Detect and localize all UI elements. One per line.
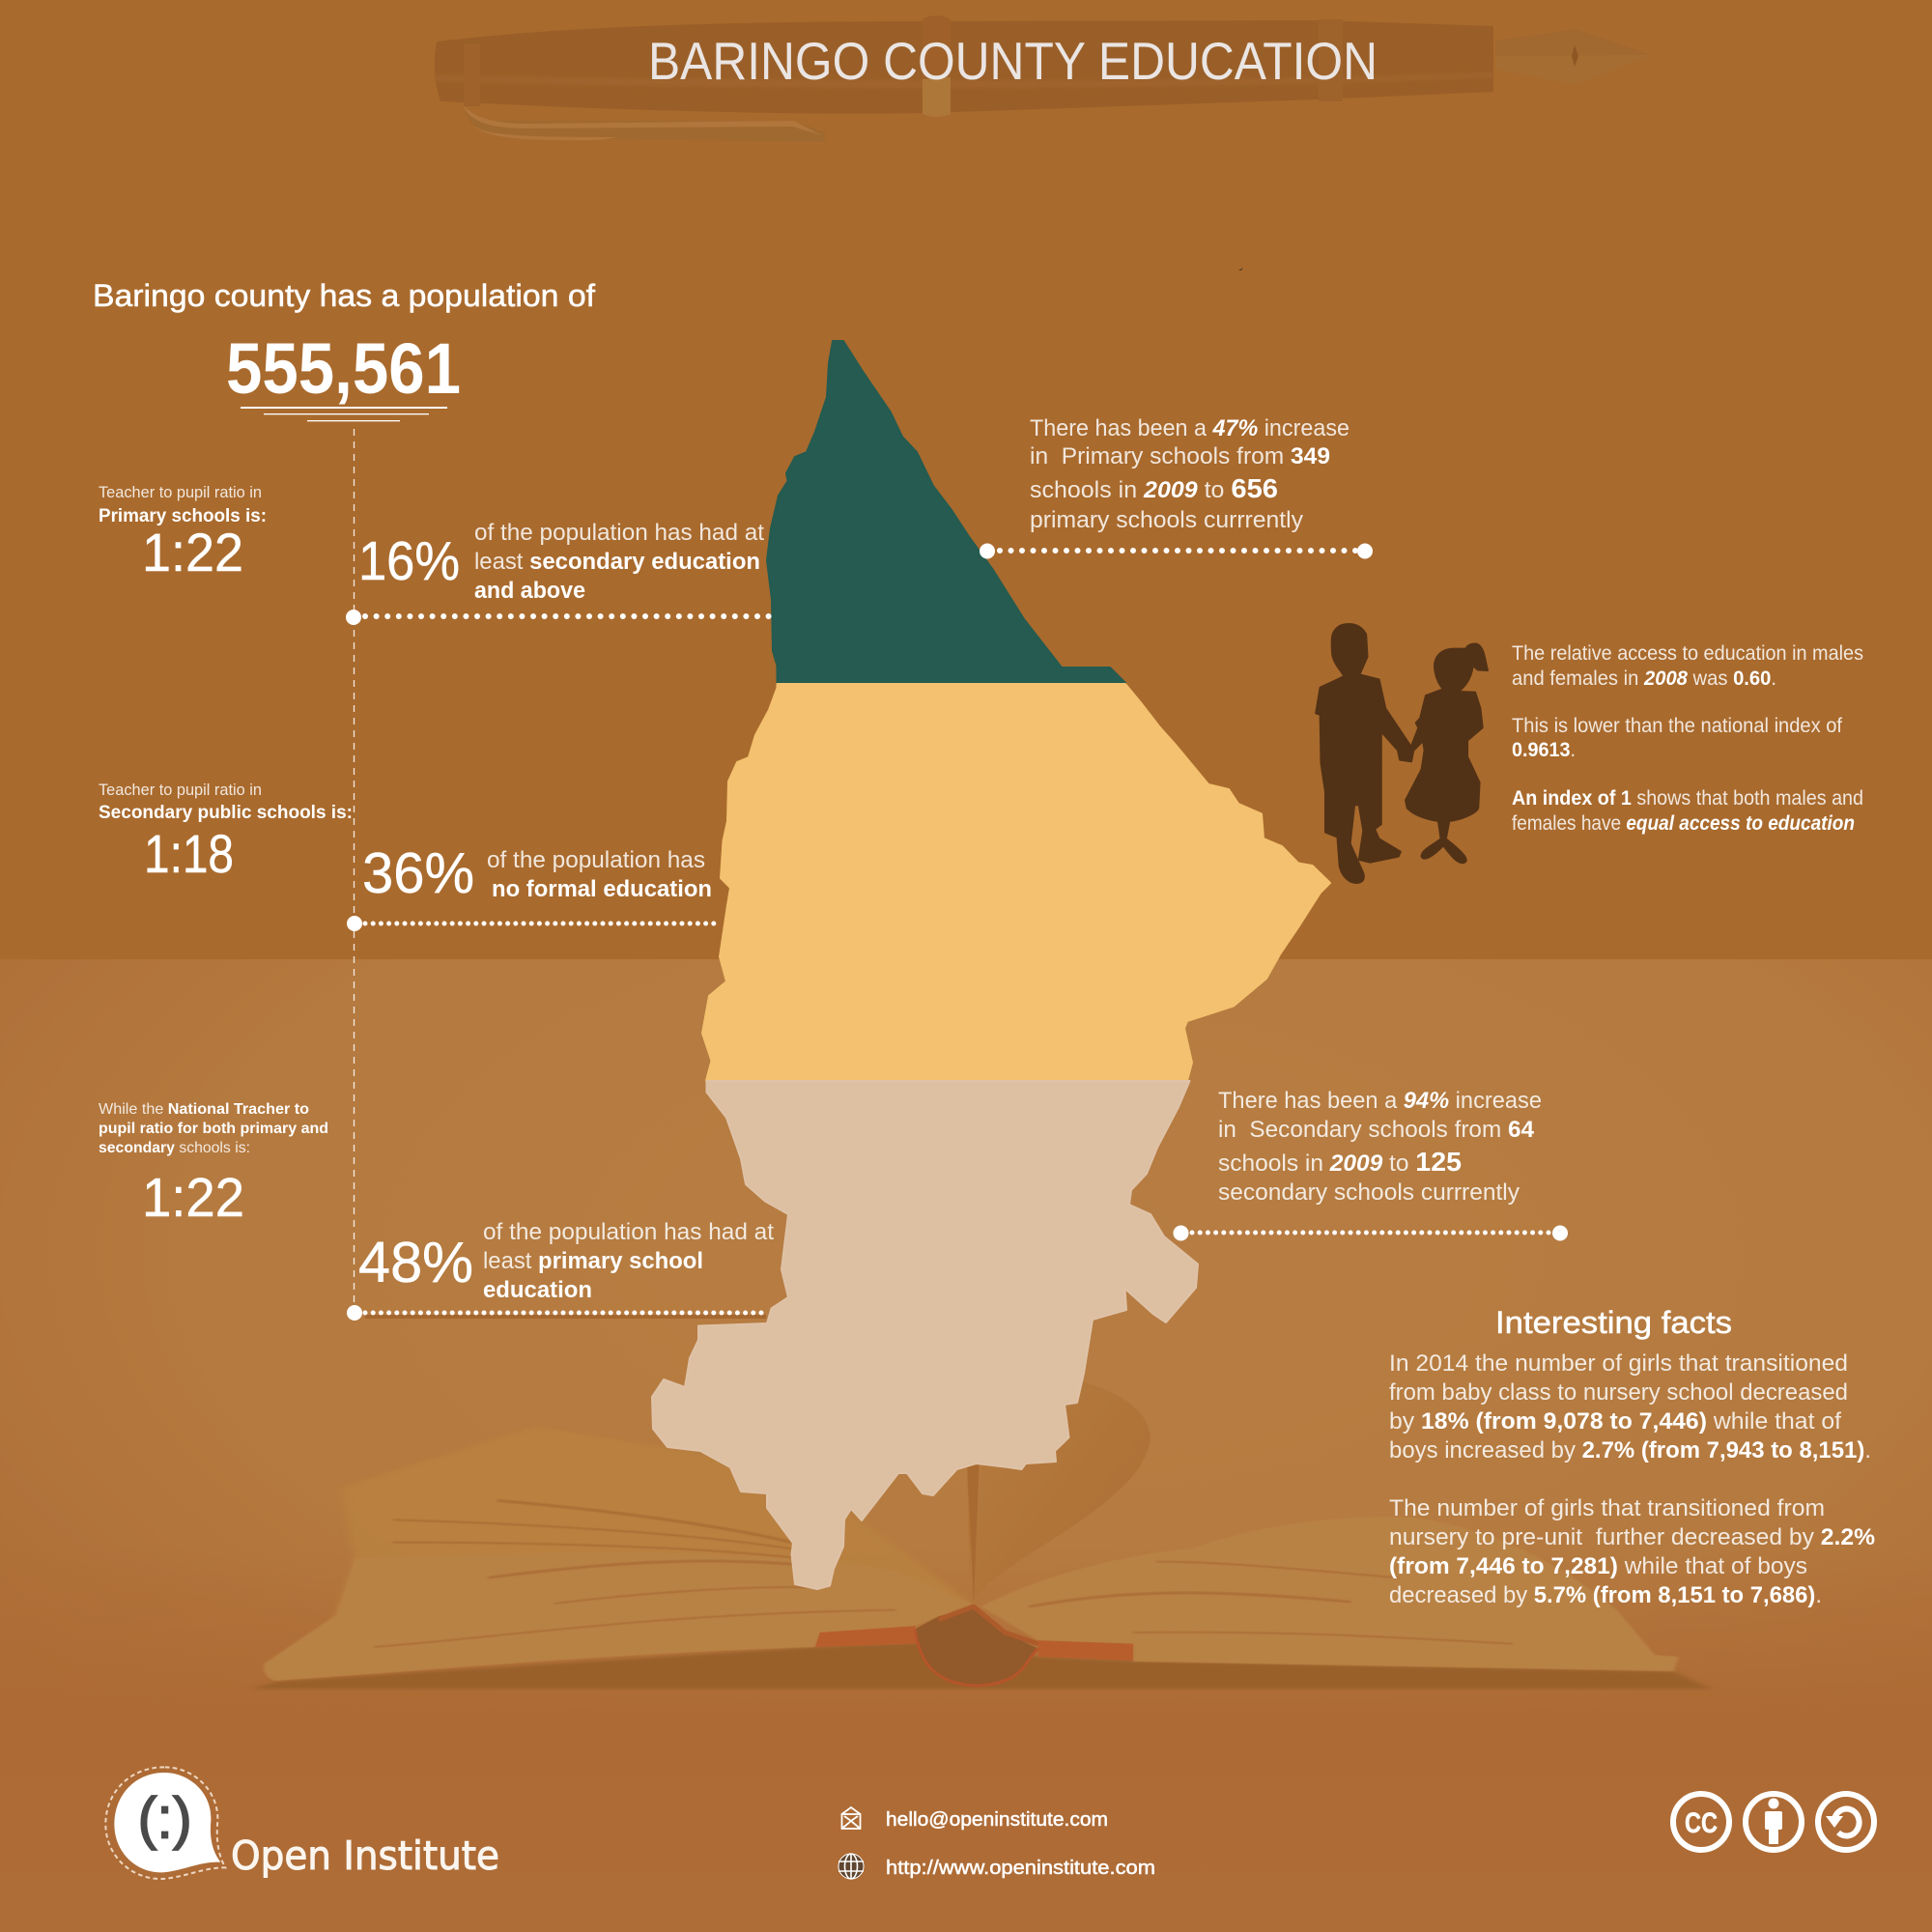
population heading: Baringo county has a population of xyxy=(93,278,595,313)
stat: 16% secondary education: least secondary education xyxy=(474,549,760,575)
background: floor xyxy=(0,1546,1932,1932)
callout: primary schools increase: schools in 2009 to 656 xyxy=(1030,473,1278,503)
stat: 48% primary school: of the population has had at xyxy=(483,1219,774,1245)
callout: primary schools increase: There has been a 47% increase xyxy=(1030,415,1350,441)
icon: boy and girl silhouettes xyxy=(1316,624,1488,883)
callout: secondary schools increase: schools in 2009 to 125 xyxy=(1218,1147,1462,1177)
ratio: national: While the National Tracher to xyxy=(99,1101,309,1118)
contact: email: hello@openinstitute.com xyxy=(886,1809,1108,1831)
stat: 48% primary school: 48% xyxy=(358,1231,473,1294)
icon: creative commons share-alike xyxy=(1818,1794,1874,1850)
ratio: national: 1:22 xyxy=(142,1167,244,1229)
ratio: national: pupil ratio for both primary and xyxy=(99,1121,328,1137)
logo: Open Institute xyxy=(105,1767,499,1879)
stat: 16% secondary education: and above xyxy=(474,578,585,604)
icon: envelope xyxy=(842,1807,860,1829)
text block: interesting facts: by 18% (from 9,078 to 7,446) while that of xyxy=(1389,1408,1841,1435)
text block: interesting facts xyxy=(1389,1350,1875,1608)
band: secondary education 16% (green) xyxy=(767,341,1125,683)
stat: 48% primary school: least primary school xyxy=(483,1248,703,1274)
small stray mark xyxy=(1238,268,1243,270)
logo: Open Institute: (:) xyxy=(138,1785,192,1850)
callout: secondary schools increase: There has been a 94% increase xyxy=(1218,1088,1542,1114)
icon: creative commons attribution xyxy=(1746,1794,1802,1850)
icon: creative commons CC: CC xyxy=(1685,1807,1718,1839)
ratio: primary schools: Teacher to pupil ratio in xyxy=(99,484,262,501)
timeline: dashed vertical line xyxy=(354,429,355,1312)
ratio: primary schools: Primary schools is: xyxy=(99,505,267,526)
population underlines xyxy=(241,407,447,421)
text block: access to education index xyxy=(1512,642,1863,835)
stat: 36% no formal education xyxy=(347,841,720,931)
background: lower panel xyxy=(0,959,1932,1932)
text block: access to education index: The relative access to education in males xyxy=(1512,642,1863,665)
stat: 16% secondary education xyxy=(346,520,769,625)
map: Baringo county in three bands xyxy=(652,341,1330,1589)
contact: website: http://www.openinstitute.com xyxy=(886,1858,1155,1879)
stat: 16% secondary education: of the population has had at xyxy=(474,520,764,546)
callout: secondary schools increase: secondary schools currrently xyxy=(1218,1179,1520,1206)
ratio: secondary schools xyxy=(99,781,353,884)
text block: interesting facts: nursery to pre-unit further decreased by 2.2% xyxy=(1389,1524,1875,1550)
ratio: primary schools xyxy=(99,484,267,582)
stat: 36% no formal education: of the population has xyxy=(487,847,705,873)
stat: 36% no formal education: no formal education xyxy=(492,876,712,902)
callout: primary schools increase: in Primary schools from 349 xyxy=(1030,443,1330,469)
title: BARINGO COUNTY EDUCATION xyxy=(648,31,1378,91)
text block: interesting facts: decreased by 5.7% (from 8,151 to 7,686). xyxy=(1389,1582,1822,1608)
ratio: secondary schools: Secondary public schools is: xyxy=(99,802,353,823)
text block: interesting facts: boys increased by 2.7% (from 7,943 to 8,151). xyxy=(1389,1437,1871,1463)
text block: interesting facts: In 2014 the number of girls that transitioned xyxy=(1389,1350,1848,1377)
ratio: secondary schools: 1:18 xyxy=(144,823,234,884)
population number: 555,561 xyxy=(226,328,461,409)
text block: interesting facts: The number of girls that transitioned from xyxy=(1389,1495,1825,1521)
icon: creative commons CC xyxy=(1673,1794,1729,1850)
illustration: open book xyxy=(251,1374,1712,1689)
stat: 48% primary school: education xyxy=(483,1277,592,1303)
logo: Open Institute: Open Institute xyxy=(231,1833,499,1879)
background: upper solid band xyxy=(0,0,1932,959)
band: primary school 48% (tan) xyxy=(652,1081,1198,1589)
ratio: primary schools: 1:22 xyxy=(142,522,243,582)
heading: interesting facts: Interesting facts xyxy=(1495,1305,1732,1340)
ratio: secondary schools: Teacher to pupil ratio in xyxy=(99,781,262,799)
stat: 36% no formal education: 36% xyxy=(362,841,474,905)
text block: access to education index: females have equal access to education xyxy=(1512,812,1855,835)
text block: access to education index: An index of 1 shows that both males and xyxy=(1512,787,1863,810)
callout: secondary schools increase xyxy=(1173,1088,1568,1240)
callout: secondary schools increase: in Secondary schools from 64 xyxy=(1218,1117,1535,1143)
text block: access to education index: 0.9613. xyxy=(1512,739,1576,761)
callout: primary schools increase: primary schools currrently xyxy=(1030,507,1303,533)
stat: 16% secondary education: 16% xyxy=(358,530,460,592)
band: no formal education 36% (yellow) xyxy=(702,684,1330,1081)
text block: access to education index: This is lower than the national index of xyxy=(1512,715,1842,737)
stat: 48% primary school xyxy=(347,1219,774,1321)
callout: primary schools increase xyxy=(980,415,1373,558)
illustration: fountain pen behind title xyxy=(435,15,1651,142)
text block: interesting facts: from baby class to nursery school decreased xyxy=(1389,1379,1848,1406)
ratio: national xyxy=(99,1101,328,1229)
text block: interesting facts: (from 7,446 to 7,281) while that of boys xyxy=(1389,1553,1807,1579)
ratio: national: secondary schools is: xyxy=(99,1140,250,1156)
text block: access to education index: and females in 2008 was 0.60. xyxy=(1512,668,1776,690)
icon: globe xyxy=(838,1854,864,1879)
